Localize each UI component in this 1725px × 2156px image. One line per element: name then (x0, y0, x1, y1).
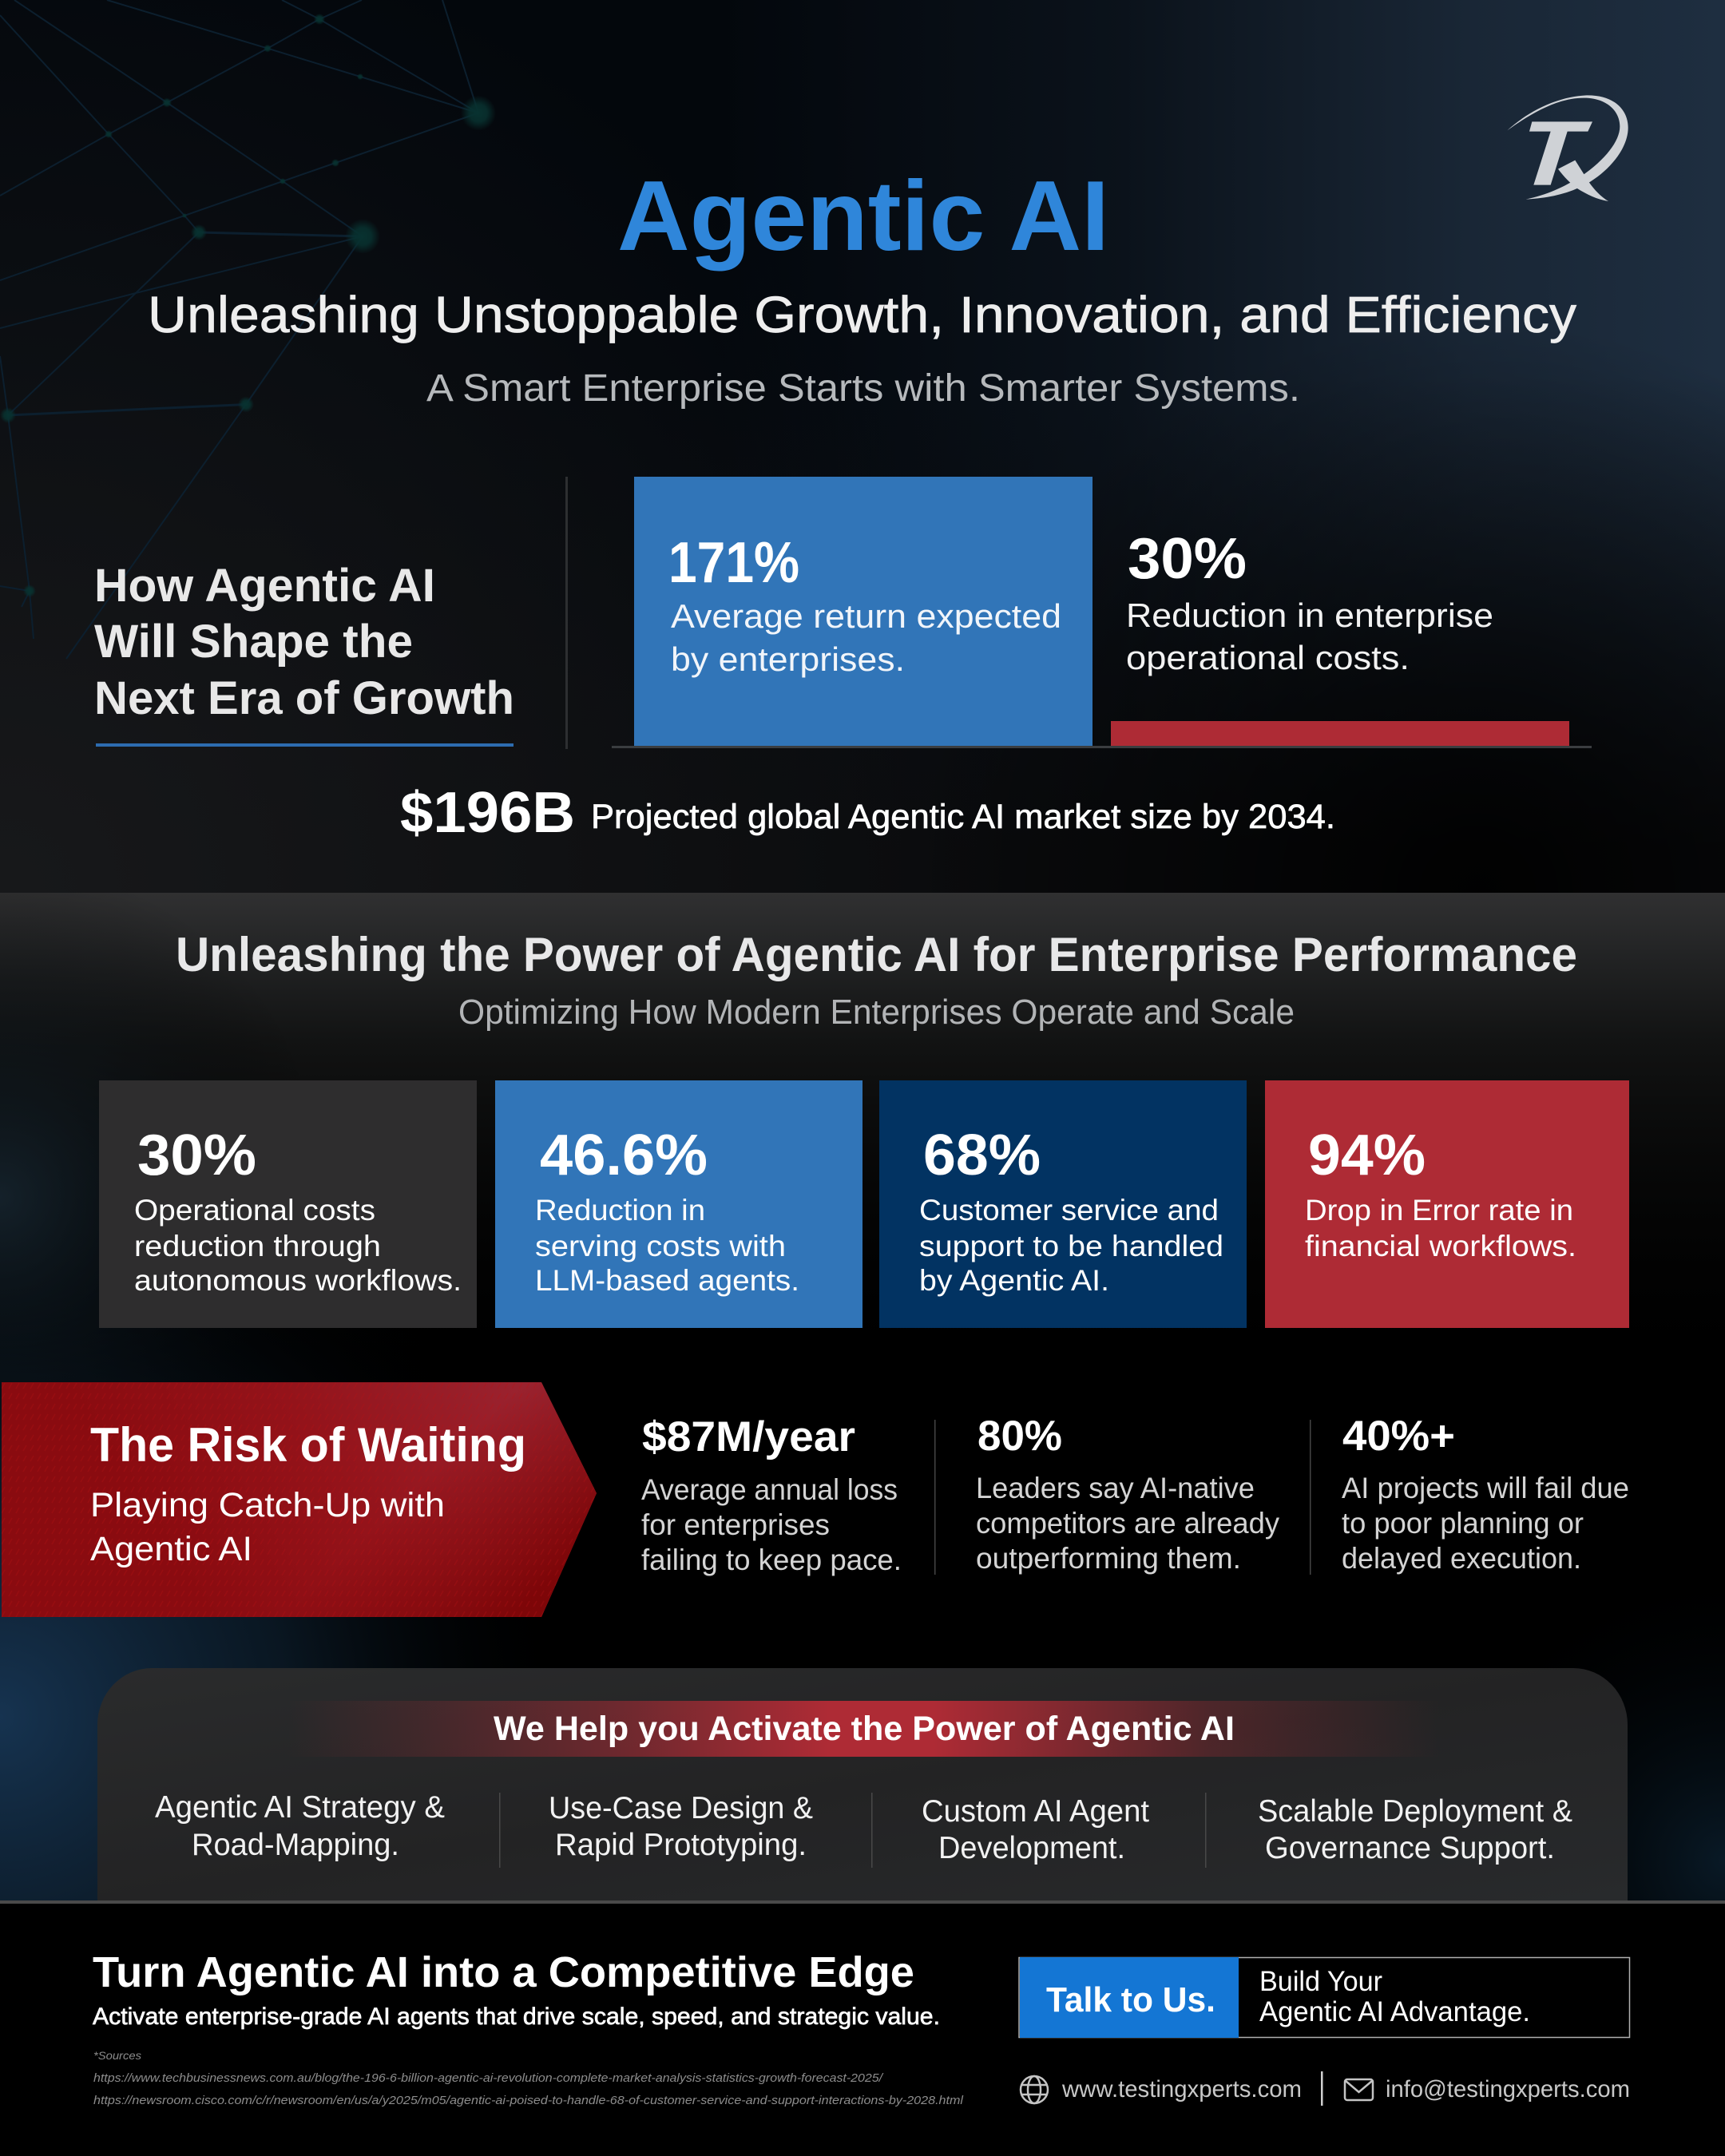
sources: https://www.techbusinessnews.com.au/blog/the-196-6-billion-agentic-ai-revolution-complete-market-analysis-statistics-growth-forecast-2025/ (93, 2071, 884, 2085)
stat: $87M/year (641, 1413, 902, 1576)
stat: $196B market size: $196B (400, 781, 575, 845)
stat: 40%+: AI projects will fail due (1342, 1472, 1629, 1504)
service: use-case design: Use-Case Design & (549, 1791, 813, 1825)
stat: 40%+: 40%+ (1342, 1413, 1455, 1460)
logo (1507, 95, 1628, 201)
stat: $196B market size: Projected global Agentic AI market size by 2034. (591, 798, 1335, 836)
service: custom agent (922, 1794, 1149, 1865)
heading: next era of growth: How Agentic AI (94, 560, 435, 612)
service: custom agent: Development. (938, 1831, 1125, 1865)
stat: $196B market size (400, 781, 1335, 845)
heading: next era of growth: Will Shape the (94, 616, 413, 668)
panel: footer (0, 1900, 1725, 2156)
banner heading: We Help you Activate the Power of Agentic AI (494, 1710, 1235, 1748)
call to action: Agentic AI Advantage. (1259, 1996, 1530, 2027)
heading: next era of growth: Next Era of Growth (94, 672, 514, 724)
stat: 80%: Leaders say AI-native (976, 1472, 1255, 1504)
card: 46.6% serving costs (495, 1080, 862, 1328)
network graphic (0, 0, 496, 659)
panel: hero section (0, 0, 1725, 893)
card: 30% operational costs: 30% (137, 1124, 256, 1187)
card: 30% operational costs: reduction through (134, 1230, 381, 1262)
card: 46.6% serving costs: Reduction in (535, 1194, 705, 1227)
arrow: the risk of waiting: Agentic AI (90, 1530, 252, 1568)
bar chart: return vs cost (612, 477, 1592, 748)
card: 68% customer service (879, 1080, 1247, 1328)
stat: 40%+: delayed execution. (1342, 1542, 1581, 1575)
stat: 171%: by enterprises. (671, 640, 905, 678)
card: 94% error rate: financial workflows. (1305, 1230, 1576, 1262)
stat: 80% (976, 1413, 1279, 1575)
stat: $87M/year: Average annual loss (641, 1473, 898, 1506)
call to action: Build Your (1259, 1966, 1382, 1997)
card: 46.6% serving costs: serving costs with (535, 1230, 786, 1262)
section heading: Unleashing the Power of Agentic AI for Enterprise Performance (176, 928, 1577, 981)
section background (0, 893, 1725, 1904)
stat: 171%: Average return expected (671, 597, 1061, 635)
card: 68% customer service: 68% (923, 1124, 1041, 1187)
card: 30% operational costs (99, 1080, 477, 1328)
card: 46.6% serving costs: LLM-based agents. (535, 1264, 799, 1297)
call to action: Talk to Us. (1046, 1980, 1215, 2019)
stat: $87M/year: for enterprises (641, 1508, 830, 1541)
card: 30% operational costs: Operational costs (134, 1194, 375, 1227)
arrow: the risk of waiting: Playing Catch-Up with (90, 1486, 445, 1524)
card: 46.6% serving costs: 46.6% (540, 1124, 708, 1187)
stat: $87M/year: failing to keep pace. (641, 1544, 902, 1576)
service: deployment (1258, 1794, 1572, 1865)
service: deployment: Governance Support. (1265, 1831, 1555, 1865)
card: 68% customer service: support to be handled (919, 1230, 1223, 1262)
stat: 40%+: to poor planning or (1342, 1507, 1584, 1540)
stat: 30%: Reduction in enterprise (1126, 596, 1493, 634)
service: strategy (155, 1790, 445, 1862)
card: 94% error rate (1265, 1080, 1629, 1328)
card: 94% error rate: Drop in Error rate in (1305, 1194, 1573, 1227)
sources (93, 2049, 964, 2107)
title: Agentic AI (617, 161, 1109, 271)
stat: 80%: outperforming them. (976, 1542, 1241, 1575)
call to action (1019, 1957, 1629, 2038)
icon: globe (1021, 2076, 1048, 2103)
sources: https://newsroom.cisco.com/c/r/newsroom/en/us/a/y2025/m05/agentic-ai-poised-to-handle-68-of-customer-service-and-support-interactions-by-2028.html (93, 2094, 964, 2107)
stat: 40%+ (1342, 1413, 1629, 1575)
bar: 30% cost reduction (1111, 721, 1569, 746)
panel: services (97, 1668, 1628, 1904)
arrow: the risk of waiting (2, 1382, 597, 1617)
stat: 30%: operational costs. (1126, 639, 1410, 676)
website: www.testingxperts.com (1061, 2076, 1302, 2102)
card: 94% error rate: 94% (1308, 1124, 1426, 1187)
stat: 171% (668, 531, 1061, 678)
stat: 80%: competitors are already (976, 1507, 1279, 1540)
service: custom agent: Custom AI Agent (922, 1794, 1149, 1829)
bar: 171% return (634, 477, 1092, 746)
service: deployment: Scalable Deployment & (1258, 1794, 1572, 1829)
icon: mail (1345, 2079, 1373, 2100)
service: strategy: Agentic AI Strategy & (155, 1790, 445, 1825)
footer subheading: Activate enterprise-grade AI agents that drive scale, speed, and strategic value. (93, 2003, 940, 2030)
card: 68% customer service: by Agentic AI. (919, 1264, 1109, 1297)
heading: next era of growth (94, 560, 514, 747)
card: 30% operational costs: autonomous workflows. (134, 1264, 462, 1297)
tagline: A Smart Enterprise Starts with Smarter Systems. (426, 367, 1300, 410)
section subheading: Optimizing How Modern Enterprises Operate and Scale (458, 993, 1295, 1032)
email: info@testingxperts.com (1386, 2076, 1630, 2102)
stat: 171%: 171% (668, 531, 799, 595)
sources: *Sources (93, 2049, 141, 2062)
stat: 80%: 80% (978, 1413, 1062, 1460)
hero background (0, 0, 1725, 893)
stat: 30%: 30% (1128, 527, 1247, 591)
banner heading (288, 1701, 1440, 1757)
arrow: the risk of waiting: The Risk of Waiting (90, 1418, 526, 1472)
service: use-case design: Rapid Prototyping. (555, 1828, 807, 1862)
stat: $87M/year: $87M/year (642, 1413, 855, 1460)
stat: 30% (1126, 527, 1493, 676)
footer heading: Turn Agentic AI into a Competitive Edge (93, 1948, 914, 1996)
card: 68% customer service: Customer service and (919, 1194, 1219, 1227)
subtitle: Unleashing Unstoppable Growth, Innovation, and Efficiency (148, 286, 1576, 343)
service: use-case design (549, 1791, 813, 1862)
panel: performance section (0, 893, 1725, 1904)
service: strategy: Road-Mapping. (192, 1828, 399, 1862)
